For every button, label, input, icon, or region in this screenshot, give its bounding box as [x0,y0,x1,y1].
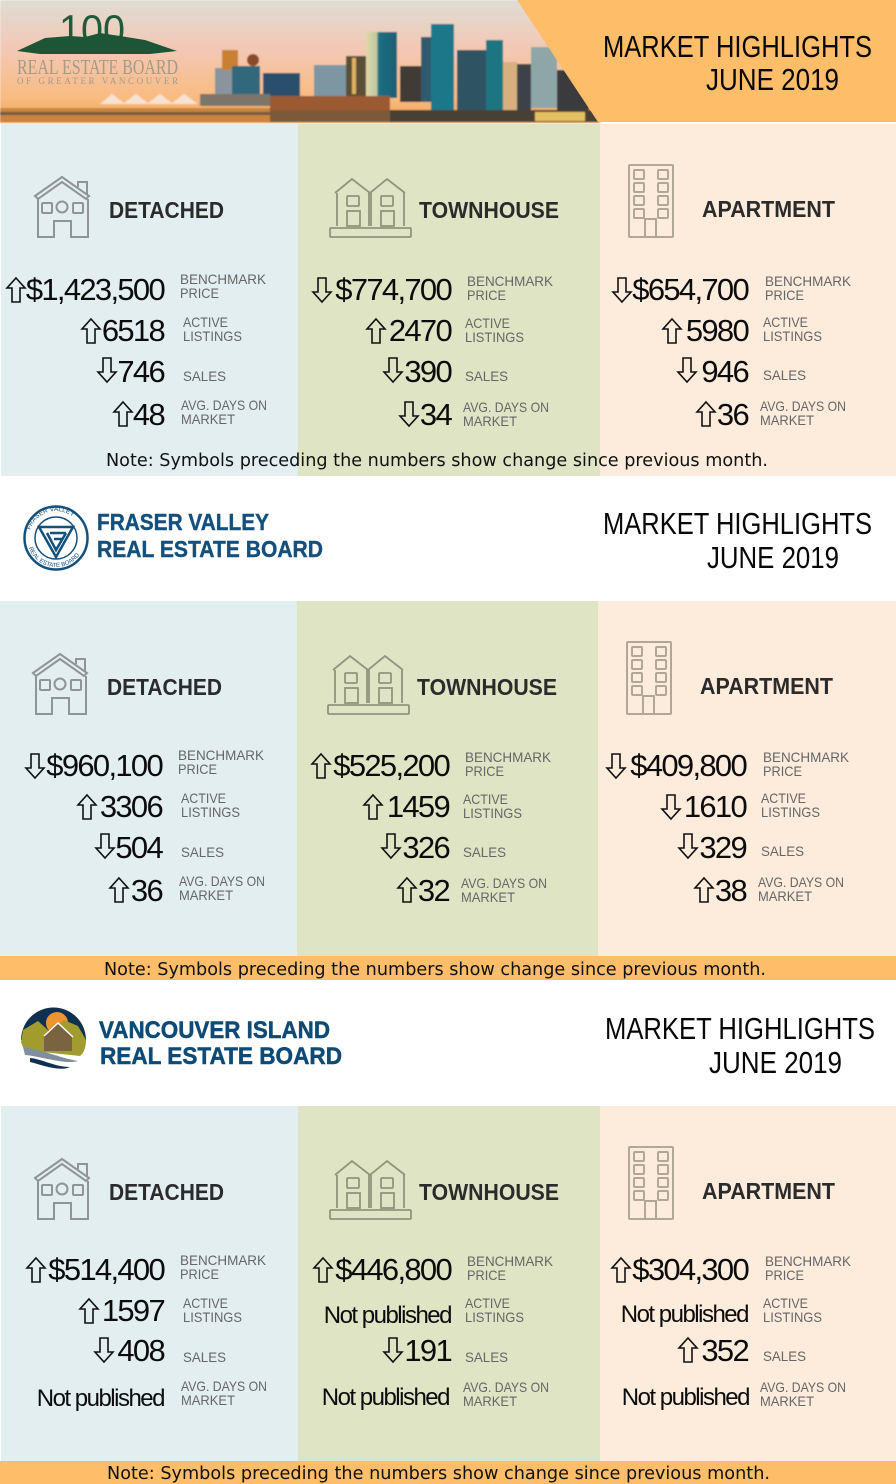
panel group: Vancouver Island stats [1,1106,896,1461]
column: townhouse: 191 [404,1333,451,1368]
icon: townhouses [330,1161,411,1219]
logo: Vancouver Island Real Estate Board [21,1008,342,1070]
column: apartment: BENCHMARK [765,1253,852,1269]
column: apartment: 38 [715,873,746,908]
column: apartment: Not published [622,1384,749,1411]
header banner: Greater Vancouver [0,0,896,123]
column: detached: AVG. DAYS ON [181,397,267,413]
header: Fraser Valley [23,505,872,575]
column: detached [7,177,267,432]
column: detached: 1597 [102,1293,164,1328]
column: detached: Not published [37,1385,164,1412]
column: detached: $514,400 [48,1252,165,1287]
column: apartment [612,1147,852,1411]
column: townhouse: MARKET [463,413,517,429]
column: apartment: 946 [701,354,748,389]
skyline photo [0,0,600,123]
column: detached: 36 [131,873,162,908]
column: townhouse: TOWNHOUSE [419,197,559,223]
column: apartment: ACTIVE [761,790,806,806]
column: apartment: MARKET [760,412,814,428]
column: detached: DETACHED [107,674,222,700]
logo: Real Estate Board of Greater Vancouver: REAL ESTATE BOARD [17,55,178,79]
column: apartment: PRICE [765,1267,804,1283]
column: townhouse: ACTIVE [465,315,510,331]
column: townhouse: Not published [322,1384,449,1411]
column: townhouse: ACTIVE [463,791,508,807]
column: detached: BENCHMARK [180,1252,267,1268]
column: detached: AVG. DAYS ON [181,1378,267,1394]
column: townhouse: 1459 [387,789,449,824]
header: Vancouver Island [21,1008,875,1080]
icon: house [35,1159,89,1219]
logo: Fraser Valley Real Estate Board: REAL ESTATE BOARD [28,546,79,567]
column: detached: MARKET [181,411,235,427]
column: townhouse: BENCHMARK [467,1253,554,1269]
icon: house [35,177,89,237]
column: apartment: SALES [761,843,804,859]
logo: Real Estate Board of Greater Vancouver: OF GREATER VANCOUVER [17,76,178,86]
column: detached: DETACHED [109,1179,224,1205]
column: apartment: MARKET [758,888,812,904]
column: detached: 746 [117,354,164,389]
column: townhouse: SALES [465,368,508,384]
column: apartment: 1610 [684,789,747,824]
column: apartment: 352 [701,1333,748,1368]
column: apartment: SALES [763,1348,806,1364]
column: apartment: BENCHMARK [763,749,850,765]
note band: Vancouver Island: Note: Symbols preceding the numbers show change since previous month. [107,1463,770,1484]
orange title band [517,0,896,122]
title [603,29,872,97]
column: detached: MARKET [179,887,233,903]
column: townhouse: 326 [402,830,449,865]
column: detached: 408 [117,1333,164,1368]
column: detached: $960,100 [46,748,163,783]
column: apartment: $409,800 [630,748,747,783]
column: apartment: AVG. DAYS ON [760,398,846,414]
column: apartment [613,165,852,432]
column: apartment: AVG. DAYS ON [758,874,844,890]
column: apartment [607,642,850,908]
logo: Vancouver Island Real Estate Board: VANCOUVER ISLAND [99,1017,330,1044]
column: townhouse [313,179,559,432]
column: detached: PRICE [178,761,217,777]
column: apartment: SALES [763,367,806,383]
column: apartment: APARTMENT [702,196,835,222]
column: townhouse: ACTIVE [465,1295,510,1311]
column: detached: DETACHED [109,197,224,223]
column: apartment: LISTINGS [763,1309,822,1325]
column: apartment: Not published [621,1301,748,1328]
column: apartment: $304,300 [632,1252,749,1287]
column: townhouse: MARKET [461,889,515,905]
icon: apartment [629,1147,673,1219]
icon: apartment [629,165,673,237]
column: apartment: 5980 [686,313,749,348]
panel group: Fraser Valley stats [0,601,896,956]
column: townhouse: LISTINGS [465,1309,524,1325]
column: apartment: LISTINGS [763,328,822,344]
column: apartment: BENCHMARK [765,273,852,289]
title [603,506,872,575]
note band: Fraser Valley [0,956,896,980]
column: townhouse: 32 [418,873,449,908]
logo: Real Estate Board of Greater Vancouver: 100 [59,6,125,53]
column: apartment: APARTMENT [700,673,833,699]
column: townhouse: PRICE [467,1267,506,1283]
column: detached: ACTIVE [183,314,228,330]
column: detached [26,654,265,908]
column: detached: ACTIVE [183,1295,228,1311]
column: apartment: PRICE [765,287,804,303]
column: apartment: $654,700 [632,272,749,307]
column: townhouse: Not published [324,1302,451,1329]
column: townhouse: BENCHMARK [465,749,552,765]
logo: Fraser Valley Real Estate Board: FRASER VALLEY [97,509,269,535]
column: townhouse: 2470 [389,313,452,348]
column: detached: 504 [115,830,163,865]
column: apartment: ACTIVE [763,1295,808,1311]
column: detached: 6518 [102,313,164,348]
title: JUNE 2019 [709,1045,842,1080]
column: townhouse: TOWNHOUSE [419,1179,559,1205]
column: townhouse: PRICE [467,287,506,303]
column: detached: MARKET [181,1392,235,1408]
column: apartment: MARKET [760,1393,814,1409]
title [605,1011,875,1080]
column: townhouse: TOWNHOUSE [417,674,557,700]
column: townhouse [312,656,557,908]
column: townhouse: SALES [463,844,506,860]
column: detached: BENCHMARK [178,747,265,763]
note band: Vancouver Island [0,1461,896,1484]
column: detached: LISTINGS [183,328,242,344]
column: townhouse: $446,800 [335,1252,452,1287]
note: Note: Symbols preceding the numbers show change since previous month. [106,450,768,471]
logo: Fraser Valley Real Estate Board: REAL ESTATE BOARD [97,536,323,562]
title: JUNE 2019 [706,62,839,97]
column: apartment: APARTMENT [702,1178,835,1204]
column: apartment: PRICE [763,763,802,779]
column: townhouse: $774,700 [335,272,452,307]
logo: Real Estate Board of Greater Vancouver [17,6,178,86]
column: townhouse: AVG. DAYS ON [463,399,549,415]
column: detached: PRICE [180,1266,219,1282]
column: detached: AVG. DAYS ON [179,873,265,889]
icon: house [33,654,87,714]
column: apartment: LISTINGS [761,804,820,820]
column: detached: ACTIVE [181,790,226,806]
column: townhouse: AVG. DAYS ON [463,1379,549,1395]
column: townhouse: AVG. DAYS ON [461,875,547,891]
column: townhouse: MARKET [463,1393,517,1409]
column: detached: LISTINGS [181,804,240,820]
column: detached: PRICE [180,285,219,301]
icon: townhouses [330,179,411,237]
panel group: Greater Vancouver stats [1,124,896,476]
column: detached: 3306 [100,789,162,824]
column: detached: LISTINGS [183,1309,242,1325]
logo: Fraser Valley Real Estate Board [23,505,323,571]
column: apartment: AVG. DAYS ON [760,1379,846,1395]
logo: Vancouver Island Real Estate Board: REAL ESTATE BOARD [100,1043,342,1070]
title: JUNE 2019 [707,540,839,575]
column: apartment: 329 [699,830,746,865]
column: detached: BENCHMARK [180,271,267,287]
column: townhouse: BENCHMARK [467,273,554,289]
icon: apartment [627,642,671,714]
column: apartment: ACTIVE [763,314,808,330]
column: apartment: 36 [717,397,748,432]
column: detached [27,1159,267,1412]
column: townhouse: LISTINGS [465,329,524,345]
column: townhouse: PRICE [465,763,504,779]
column: detached: 48 [133,397,164,432]
column: townhouse: SALES [465,1349,508,1365]
column: detached: SALES [183,368,226,384]
column: townhouse [314,1161,559,1411]
column: townhouse: 34 [420,397,452,432]
column: townhouse: 390 [404,354,452,389]
column: townhouse: $525,200 [333,748,450,783]
column: detached: $1,423,500 [26,272,165,307]
icon: townhouses [328,656,409,714]
column: townhouse: LISTINGS [463,805,522,821]
column: detached: SALES [183,1349,226,1365]
logo: Fraser Valley Real Estate Board: FRASER VALLEY [27,508,74,530]
column: detached: SALES [181,844,224,860]
note band: Fraser Valley: Note: Symbols preceding the numbers show change since previous month. [104,959,766,980]
